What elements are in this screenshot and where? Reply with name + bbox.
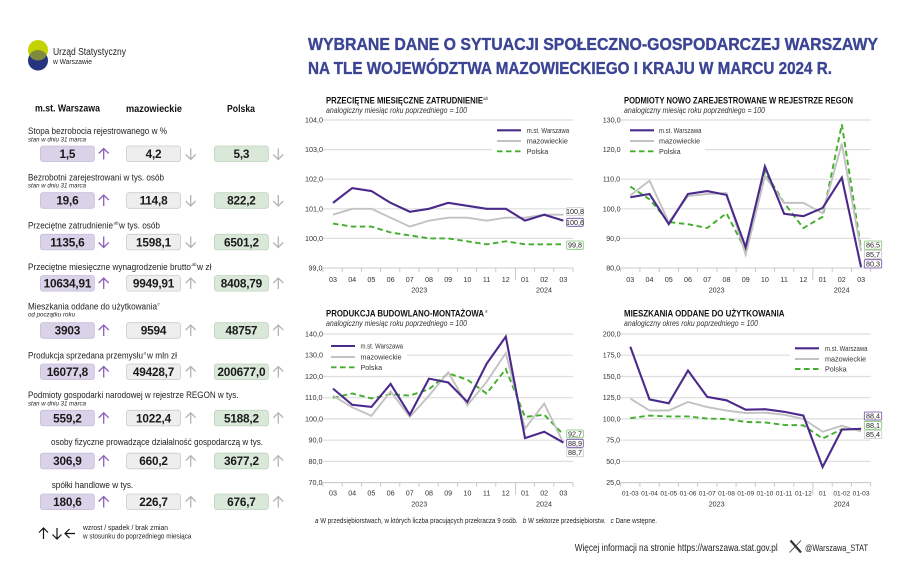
chart: produkcja budowlano-montażowa: 05 xyxy=(367,488,375,498)
chart: przeciętne miesięczne zatrudnienie: m.st. Warszawa xyxy=(527,126,569,135)
chart: mieszkania oddane do użytkowania xyxy=(603,308,882,508)
chart: przeciętne miesięczne zatrudnienie xyxy=(305,96,584,294)
chart: produkcja budowlano-montażowa: 06 xyxy=(387,488,395,498)
chart: podmioty nowo zarejestrowane: 86,5 xyxy=(866,241,880,250)
chart: przeciętne miesięczne zatrudnienie: 103,0 xyxy=(305,145,323,154)
column headers: m.st. Warszawa xyxy=(35,104,100,114)
chart: mieszkania oddane do użytkowania: 25,0 xyxy=(606,478,620,487)
chart: mieszkania oddane do użytkowania: 01-11 xyxy=(776,490,793,498)
chart: przeciętne miesięczne zatrudnienie: 06 xyxy=(387,275,395,284)
row: stopa bezrobocia: 1,5 xyxy=(59,147,76,161)
chart: produkcja budowlano-montażowa xyxy=(305,308,583,508)
chart: przeciętne miesięczne zatrudnienie: 09 xyxy=(444,275,452,284)
row: wynagrodzenie: Przeciętne miesięczne wynagrodzenie brutto xyxy=(28,262,191,273)
arrow legend: w stosunku do poprzedniego miesiąca xyxy=(82,534,192,540)
chart: przeciętne miesięczne zatrudnienie: ab xyxy=(483,96,489,101)
chart: podmioty nowo zarejestrowane: mazowieckie xyxy=(659,136,700,146)
row: przeciętne zatrudnienie xyxy=(28,220,283,250)
row: osoby fizyczne: 660,2 xyxy=(139,454,168,468)
chart: podmioty nowo zarejestrowane: 110,0 xyxy=(603,175,620,184)
chart: mieszkania oddane do użytkowania: 01-03 xyxy=(853,490,870,498)
chart: podmioty nowo zarejestrowane: Polska xyxy=(659,147,681,156)
chart: przeciętne miesięczne zatrudnienie: 04 xyxy=(348,275,356,284)
title xyxy=(308,34,878,78)
chart: podmioty nowo zarejestrowane: 08 xyxy=(722,275,730,284)
row: mieszkania oddane: Mieszkania oddane do użytkowania xyxy=(28,302,158,312)
row: bezrobotni zarejestrowani: 19,6 xyxy=(56,194,79,208)
chart: przeciętne miesięczne zatrudnienie: 11 xyxy=(483,275,490,284)
chart: produkcja budowlano-montażowa: mazowieckie xyxy=(360,352,402,362)
row: osoby fizyczne xyxy=(40,437,283,469)
chart: przeciętne miesięczne zatrudnienie: mazowieckie xyxy=(527,136,568,146)
footnotes: a W przedsiębiorstwach, w których liczba pracujących przekracza 9 osób. b W sektorze przedsiębiorstw. c Dane wstępne. xyxy=(315,518,657,525)
chart: przeciętne miesięczne zatrudnienie: PRZECIĘTNE MIESIĘCZNE ZATRUDNIENIE xyxy=(326,96,483,106)
chart: przeciętne miesięczne zatrudnienie: 02 xyxy=(540,275,548,284)
chart: przeciętne miesięczne zatrudnienie: 10 xyxy=(463,275,471,284)
row: stopa bezrobocia: 5,3 xyxy=(233,147,250,161)
row: stopa bezrobocia: stan w dniu 31 marca xyxy=(28,136,86,144)
chart: mieszkania oddane do użytkowania: mazowieckie xyxy=(825,354,866,364)
column headers xyxy=(35,104,255,115)
chart: przeciętne miesięczne zatrudnienie: 100,0 xyxy=(305,234,323,243)
chart: mieszkania oddane do użytkowania: 2023 xyxy=(709,500,725,508)
row: produkcja sprzedana xyxy=(28,350,283,380)
chart: produkcja budowlano-montażowa: 09 xyxy=(444,488,452,498)
chart: przeciętne miesięczne zatrudnienie: 104,0 xyxy=(305,116,323,124)
chart: przeciętne miesięczne zatrudnienie: 07 xyxy=(406,275,414,284)
row: wynagrodzenie: w zł xyxy=(196,262,212,273)
chart: mieszkania oddane do użytkowania: 01-08 xyxy=(718,490,735,498)
row: bezrobotni zarejestrowani xyxy=(28,172,283,208)
chart: produkcja budowlano-montażowa: 10 xyxy=(463,488,471,498)
row: mieszkania oddane: c xyxy=(158,302,160,306)
chart: produkcja budowlano-montażowa: 2024 xyxy=(536,500,552,508)
row: wynagrodzenie: 10634,91 xyxy=(44,276,92,290)
chart: podmioty nowo zarejestrowane: m.st. Warszawa xyxy=(659,126,702,135)
row: spółki handlowe: 180,6 xyxy=(53,495,82,509)
chart: produkcja budowlano-montażowa: 100,0 xyxy=(305,414,323,423)
chart: produkcja budowlano-montażowa: 92,7 xyxy=(568,429,582,438)
row: podmioty gospodarki xyxy=(28,390,283,426)
chart: podmioty nowo zarejestrowane: analogiczny miesiąc roku poprzedniego = 100 xyxy=(624,106,766,115)
row: osoby fizyczne: 3677,2 xyxy=(224,454,259,468)
row: podmioty gospodarki: 559,2 xyxy=(53,411,82,425)
logo: Urząd Statystyczny w Warszawie: w Warszawie xyxy=(52,59,92,66)
row: przeciętne zatrudnienie: 6501,2 xyxy=(224,235,259,249)
chart: podmioty nowo zarejestrowane: 90,0 xyxy=(606,234,620,243)
row: produkcja sprzedana: a xyxy=(144,350,146,356)
chart: mieszkania oddane do użytkowania: 125,0 xyxy=(603,393,621,402)
row: bezrobotni zarejestrowani: 822,2 xyxy=(227,194,256,208)
row: produkcja sprzedana: 16077,8 xyxy=(47,365,89,379)
chart: mieszkania oddane do użytkowania: analogiczny okres roku poprzedniego = 100 xyxy=(624,319,759,328)
row: stopa bezrobocia xyxy=(28,126,283,162)
chart: produkcja budowlano-montażowa: 88,7 xyxy=(568,448,582,457)
chart: produkcja budowlano-montażowa: 90,0 xyxy=(308,436,322,445)
row: mieszkania oddane: 3903 xyxy=(55,324,81,338)
row: bezrobotni zarejestrowani: stan w dniu 31 marca xyxy=(28,182,86,190)
chart: mieszkania oddane do użytkowania: m.st. Warszawa xyxy=(825,344,868,353)
chart: produkcja budowlano-montażowa: 70,0 xyxy=(308,478,322,487)
chart: przeciętne miesięczne zatrudnienie: 2024 xyxy=(536,286,552,294)
row: mieszkania oddane: od początku roku xyxy=(28,312,75,318)
chart: produkcja budowlano-montażowa: 04 xyxy=(348,488,356,498)
chart: przeciętne miesięczne zatrudnienie: 01 xyxy=(521,275,529,284)
chart: podmioty nowo zarejestrowane: 80,3 xyxy=(866,259,880,268)
chart: podmioty nowo zarejestrowane: 85,7 xyxy=(866,250,880,259)
row: spółki handlowe xyxy=(40,480,283,510)
chart: podmioty nowo zarejestrowane: 120,0 xyxy=(603,145,621,154)
chart: podmioty nowo zarejestrowane: 04 xyxy=(646,275,654,284)
row: stopa bezrobocia: Stopa bezrobocia rejestrowanego w % xyxy=(28,126,167,137)
chart: mieszkania oddane do użytkowania: 01-03 xyxy=(622,490,639,498)
chart: mieszkania oddane do użytkowania: 50,0 xyxy=(606,457,620,466)
chart: podmioty nowo zarejestrowane: 01 xyxy=(819,275,827,284)
row: przeciętne zatrudnienie: w tys. osób xyxy=(118,220,160,232)
chart: produkcja budowlano-montażowa: 11 xyxy=(483,488,490,498)
row: podmioty gospodarki: Podmioty gospodarki narodowej w rejestrze REGON w tys. xyxy=(28,390,238,401)
chart: produkcja budowlano-montażowa: 120,0 xyxy=(305,372,323,381)
row: mieszkania oddane: 9594 xyxy=(141,324,167,338)
chart: mieszkania oddane do użytkowania: 01-07 xyxy=(699,490,716,498)
footer link: Więcej informacji na stronie https://warszawa.stat.gov.pl xyxy=(575,543,778,554)
row: wynagrodzenie xyxy=(28,262,283,291)
chart: produkcja budowlano-montażowa: 2023 xyxy=(411,500,427,508)
chart: mieszkania oddane do użytkowania: 88,4 xyxy=(866,412,880,420)
chart: przeciętne miesięczne zatrudnienie: Polska xyxy=(527,147,548,156)
chart: przeciętne miesięczne zatrudnienie: 99,8 xyxy=(568,241,582,250)
chart: produkcja budowlano-montażowa: 110,0 xyxy=(305,393,322,402)
chart: podmioty nowo zarejestrowane: 11 xyxy=(780,275,788,284)
logo: Urząd Statystyczny w Warszawie xyxy=(28,40,126,70)
chart: mieszkania oddane do użytkowania: 01-05 xyxy=(660,490,678,498)
chart: produkcja budowlano-montażowa: 80,0 xyxy=(308,457,322,466)
chart: podmioty nowo zarejestrowane: 100,0 xyxy=(603,204,621,213)
chart: podmioty nowo zarejestrowane: 10 xyxy=(761,275,769,284)
chart: produkcja budowlano-montażowa: PRODUKCJA BUDOWLANO-MONTAŻOWA xyxy=(326,308,484,319)
chart: mieszkania oddane do użytkowania: 01-12 xyxy=(795,490,812,498)
chart: produkcja budowlano-montażowa: 130,0 xyxy=(305,351,323,360)
row: przeciętne zatrudnienie: 1598,1 xyxy=(136,235,172,249)
chart: przeciętne miesięczne zatrudnienie: 08 xyxy=(425,275,433,284)
row: produkcja sprzedana: Produkcja sprzedana przemysłu xyxy=(28,350,143,362)
arrow legend xyxy=(39,525,192,540)
row: wynagrodzenie: 9949,91 xyxy=(133,276,175,290)
chart: produkcja budowlano-montażowa: 03 xyxy=(329,488,337,498)
row: bezrobotni zarejestrowani: 114,8 xyxy=(140,194,168,208)
chart: przeciętne miesięczne zatrudnienie: 99,0 xyxy=(308,264,322,272)
chart: produkcja budowlano-montażowa: 03 xyxy=(559,488,567,498)
chart: przeciętne miesięczne zatrudnienie: 12 xyxy=(502,275,510,284)
row: przeciętne zatrudnienie: Przeciętne zatrudnienie xyxy=(28,220,113,232)
chart: mieszkania oddane do użytkowania: 01-02 xyxy=(833,490,851,498)
chart: produkcja budowlano-montażowa: 01 xyxy=(521,488,529,498)
row: bezrobotni zarejestrowani: Bezrobotni zarejestrowani w tys. osób xyxy=(28,172,164,184)
row: przeciętne zatrudnienie: ab xyxy=(114,220,119,226)
chart: mieszkania oddane do użytkowania: 01-10 xyxy=(756,490,774,498)
chart: podmioty nowo zarejestrowane: 09 xyxy=(742,275,750,284)
chart: produkcja budowlano-montażowa: 07 xyxy=(406,488,414,498)
chart: mieszkania oddane do użytkowania: 88,1 xyxy=(866,421,880,430)
chart: przeciętne miesięczne zatrudnienie: 100,6 xyxy=(566,218,584,227)
column headers: mazowieckie xyxy=(126,104,183,115)
chart: podmioty nowo zarejestrowane: 12 xyxy=(799,275,807,284)
row: spółki handlowe: spółki handlowe w tys. xyxy=(52,480,133,491)
row: osoby fizyczne: osoby fizyczne prowadzące działalność gospodarczą w tys. xyxy=(51,437,263,448)
chart: mieszkania oddane do użytkowania: 100,0 xyxy=(603,414,621,423)
chart: podmioty nowo zarejestrowane: 2023 xyxy=(709,286,725,294)
row: stopa bezrobocia: 4,2 xyxy=(146,147,162,161)
chart: mieszkania oddane do użytkowania: 200,0 xyxy=(603,330,621,338)
row: osoby fizyczne: 306,9 xyxy=(53,454,82,468)
chart: podmioty nowo zarejestrowane xyxy=(603,96,882,294)
chart: przeciętne miesięczne zatrudnienie: analogiczny miesiąc roku poprzedniego = 100 xyxy=(326,106,468,115)
chart: produkcja budowlano-montażowa: 12 xyxy=(502,488,510,498)
chart: produkcja budowlano-montażowa: m.st. Warszawa xyxy=(360,342,403,350)
row: wynagrodzenie: 8408,79 xyxy=(221,276,263,290)
row: przeciętne zatrudnienie: 1135,6 xyxy=(50,235,85,249)
chart: podmioty nowo zarejestrowane: 03 xyxy=(857,275,865,284)
row: produkcja sprzedana: w mln zł xyxy=(146,350,178,362)
chart: mieszkania oddane do użytkowania: 01-04 xyxy=(641,490,658,498)
column headers: Polska xyxy=(227,104,255,115)
chart: mieszkania oddane do użytkowania: 150,0 xyxy=(603,372,621,381)
chart: mieszkania oddane do użytkowania: 01-06 xyxy=(680,490,697,498)
chart: przeciętne miesięczne zatrudnienie: 03 xyxy=(329,275,337,284)
row: podmioty gospodarki: 1022,4 xyxy=(136,411,172,425)
row: podmioty gospodarki: 5188,2 xyxy=(224,411,259,425)
chart: przeciętne miesięczne zatrudnienie: 03 xyxy=(559,275,567,284)
chart: podmioty nowo zarejestrowane: 02 xyxy=(838,275,846,284)
chart: podmioty nowo zarejestrowane: 80,0 xyxy=(606,264,620,272)
X handle: @Warszawa_STAT xyxy=(805,542,868,553)
row: produkcja sprzedana: 200677,0 xyxy=(217,365,266,379)
row: spółki handlowe: 676,7 xyxy=(227,495,256,509)
row: mieszkania oddane xyxy=(28,302,283,338)
chart: produkcja budowlano-montażowa: 88,9 xyxy=(568,439,582,448)
chart: podmioty nowo zarejestrowane: 05 xyxy=(665,275,673,284)
title: NA TLE WOJEWÓDZTWA MAZOWIECKIEGO I KRAJU W MARCU 2024 R. xyxy=(308,57,832,78)
chart: mieszkania oddane do użytkowania: Polska xyxy=(825,364,847,374)
chart: podmioty nowo zarejestrowane: 130,0 xyxy=(603,116,621,124)
chart: produkcja budowlano-montażowa: a xyxy=(485,308,488,314)
icon: X logo xyxy=(790,540,801,552)
chart: produkcja budowlano-montażowa: 02 xyxy=(540,488,548,498)
chart: produkcja budowlano-montażowa: 08 xyxy=(425,488,433,498)
row: podmioty gospodarki: stan w dniu 31 marca xyxy=(28,400,86,407)
row: spółki handlowe: 226,7 xyxy=(139,495,168,509)
logo: Urząd Statystyczny w Warszawie: Urząd Statystyczny xyxy=(53,47,126,58)
chart: mieszkania oddane do użytkowania: 01-09 xyxy=(737,490,754,498)
row: wynagrodzenie: ab xyxy=(192,262,197,267)
chart: podmioty nowo zarejestrowane: 03 xyxy=(626,275,634,284)
chart: mieszkania oddane do użytkowania: MIESZKANIA ODDANE DO UŻYTKOWANIA xyxy=(624,308,785,319)
row: produkcja sprzedana: 49428,7 xyxy=(133,365,175,379)
chart: produkcja budowlano-montażowa: Polska xyxy=(360,363,382,372)
chart: mieszkania oddane do użytkowania: 2024 xyxy=(834,500,850,508)
chart: podmioty nowo zarejestrowane: 06 xyxy=(684,275,692,284)
chart: mieszkania oddane do użytkowania: 01 xyxy=(819,490,827,498)
chart: przeciętne miesięczne zatrudnienie: 2023 xyxy=(411,286,427,294)
chart: przeciętne miesięczne zatrudnienie: 05 xyxy=(367,275,375,284)
chart: podmioty nowo zarejestrowane: 2024 xyxy=(834,286,850,294)
chart: mieszkania oddane do użytkowania: 175,0 xyxy=(603,351,621,360)
chart: przeciętne miesięczne zatrudnienie: 102,0 xyxy=(305,175,323,184)
chart: mieszkania oddane do użytkowania: 75,0 xyxy=(606,436,620,445)
chart: podmioty nowo zarejestrowane: 07 xyxy=(703,275,711,284)
row: mieszkania oddane: 48757 xyxy=(225,324,258,338)
arrow legend: wzrost / spadek / brak zmian xyxy=(82,525,168,532)
chart: przeciętne miesięczne zatrudnienie: 100,8 xyxy=(566,207,584,216)
chart: przeciętne miesięczne zatrudnienie: 101,0 xyxy=(305,204,323,213)
chart: produkcja budowlano-montażowa: analogiczny miesiąc roku poprzedniego = 100 xyxy=(326,319,468,328)
chart: mieszkania oddane do użytkowania: 85,4 xyxy=(866,430,880,439)
chart: produkcja budowlano-montażowa: 140,0 xyxy=(305,330,323,338)
